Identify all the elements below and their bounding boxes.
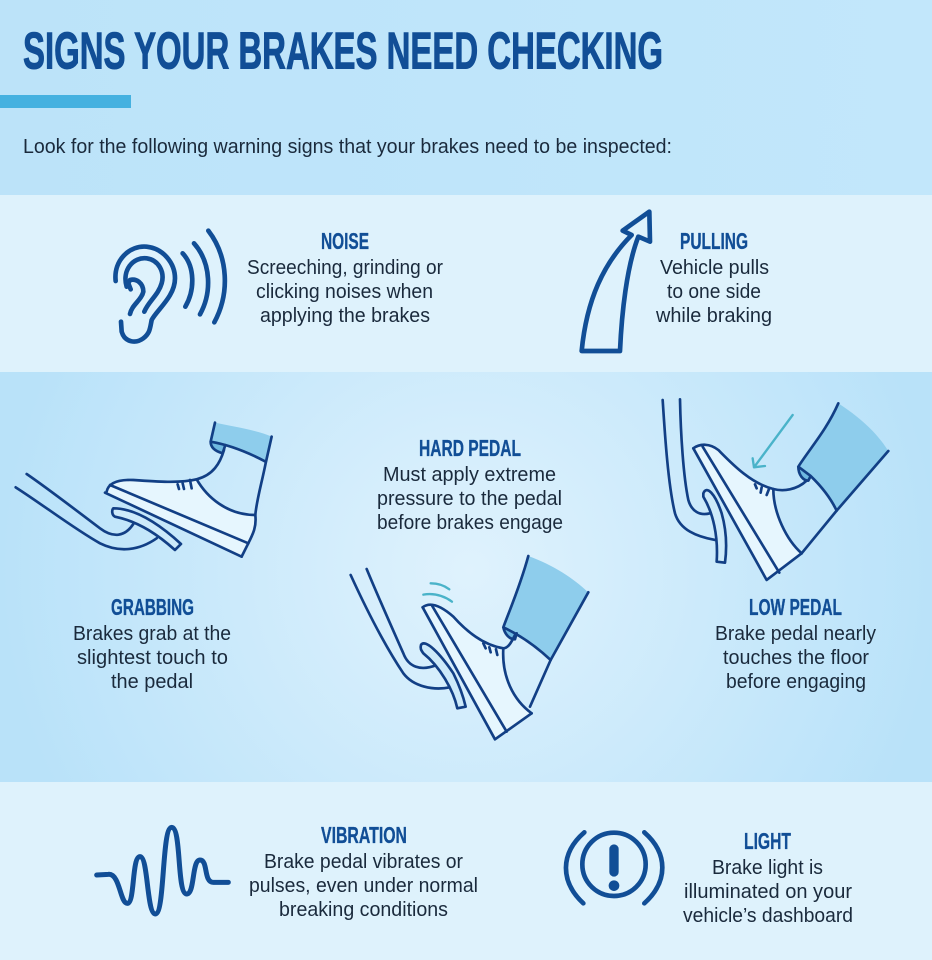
text: grabbing: slightest touch to: [77, 647, 228, 669]
text: light: [683, 828, 853, 927]
panel: vibration and light row: [0, 782, 932, 960]
text: noise: NOISE: [321, 228, 369, 254]
text: low pedal: LOW PEDAL: [749, 594, 842, 620]
panel: noise and pulling row: [0, 195, 932, 372]
text: noise: applying the brakes: [260, 305, 430, 327]
text: hard pedal: Must apply extreme: [383, 464, 556, 486]
text: noise: Screeching, grinding or: [247, 257, 443, 279]
text: hard pedal: HARD PEDAL: [419, 435, 521, 461]
text: grabbing: [73, 594, 231, 693]
text: noise: [247, 228, 443, 327]
text: pulling: PULLING: [680, 228, 748, 254]
title accent bar: [0, 95, 131, 108]
text: vibration: [249, 822, 478, 921]
illustration: hard pedal foot: [351, 556, 588, 739]
illustration: low pedal foot: [663, 399, 888, 580]
text: low pedal: [715, 594, 876, 693]
icon: pulling arrow: [582, 212, 650, 351]
panel: pedal illustrations: [0, 372, 932, 782]
text: low pedal: before engaging: [726, 671, 866, 693]
text: pulling: while braking: [655, 305, 772, 327]
text: grabbing: Brakes grab at the: [73, 623, 231, 645]
text: vibration: pulses, even under normal: [249, 875, 478, 897]
text: vibration: Brake pedal vibrates or: [264, 851, 463, 873]
text: hard pedal: [377, 435, 563, 534]
text: grabbing: the pedal: [111, 671, 193, 693]
text: light: Brake light is: [712, 857, 823, 879]
text: hard pedal: pressure to the pedal: [377, 488, 562, 510]
text: light: LIGHT: [744, 828, 791, 854]
text: pulling: [655, 228, 772, 327]
text: vibration: VIBRATION: [321, 822, 407, 848]
illustration: grabbing foot on pedal: [16, 423, 272, 557]
text: grabbing: GRABBING: [111, 594, 194, 620]
text: light: illuminated on your: [684, 881, 852, 903]
icon: brake warning light: [566, 832, 662, 903]
text: low pedal: touches the floor: [723, 647, 869, 669]
text: light: vehicle’s dashboard: [683, 905, 853, 927]
text: vibration: breaking conditions: [279, 899, 448, 921]
text: pulling: to one side: [667, 281, 761, 303]
panel: header background: [0, 0, 932, 195]
icon: vibration wave: [97, 827, 228, 914]
intro text: Look for the following warning signs that your brakes need to be inspected:: [23, 136, 672, 158]
text: pulling: Vehicle pulls: [660, 257, 769, 279]
text: low pedal: Brake pedal nearly: [715, 623, 876, 645]
text: hard pedal: before brakes engage: [377, 512, 563, 534]
icon: ear with sound waves: [115, 231, 225, 341]
text: noise: clicking noises when: [256, 281, 433, 303]
